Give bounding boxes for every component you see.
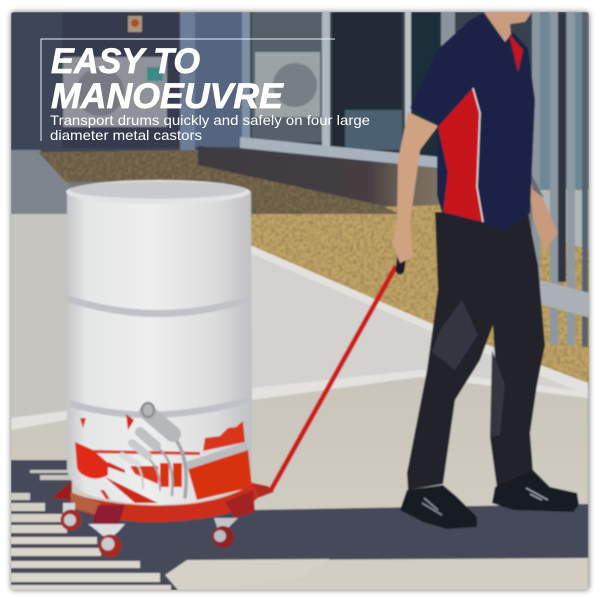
drum body <box>67 191 252 505</box>
skin: neck <box>483 12 532 43</box>
handle grip <box>398 250 405 270</box>
dolly brackets <box>52 480 72 500</box>
title: MANOEUVRE <box>51 77 285 116</box>
man <box>392 12 579 529</box>
dolly <box>52 480 274 558</box>
subtitle: Transport drums quickly and safely on four large <box>50 112 370 128</box>
dolly ring <box>72 482 258 522</box>
dolly ribbed section <box>70 492 100 515</box>
windows <box>240 12 535 168</box>
drum <box>66 180 252 505</box>
castor right <box>212 518 238 548</box>
drum lid <box>66 180 250 204</box>
gravel shaded bed <box>38 150 400 214</box>
drum ribs <box>70 296 240 318</box>
ground shadow <box>11 460 588 590</box>
heading bracket <box>41 39 335 141</box>
polo shirt <box>410 13 535 231</box>
title: EASY TO <box>51 42 200 81</box>
fence backdrop <box>540 12 589 190</box>
fence <box>532 12 590 347</box>
castor rear left <box>60 503 82 530</box>
skin: left arm <box>392 112 438 263</box>
brick wall <box>197 146 440 208</box>
dolly handle <box>271 250 405 490</box>
drum red graphic <box>75 414 252 503</box>
drum pump ladder illustration <box>122 403 186 497</box>
building wall <box>11 12 251 164</box>
skin: right arm <box>529 184 559 250</box>
concrete path <box>252 254 572 390</box>
gravel sunlit bed <box>250 204 589 388</box>
ground slab <box>11 376 588 590</box>
pavement upper <box>11 213 252 418</box>
title <box>51 42 285 116</box>
shirt red side panel <box>438 88 483 222</box>
subtitle <box>50 112 370 143</box>
subtitle: diameter metal castors <box>50 127 202 143</box>
shoes <box>400 470 579 529</box>
trousers <box>407 212 545 490</box>
castor front <box>88 524 125 558</box>
shirt red collar <box>509 34 523 72</box>
